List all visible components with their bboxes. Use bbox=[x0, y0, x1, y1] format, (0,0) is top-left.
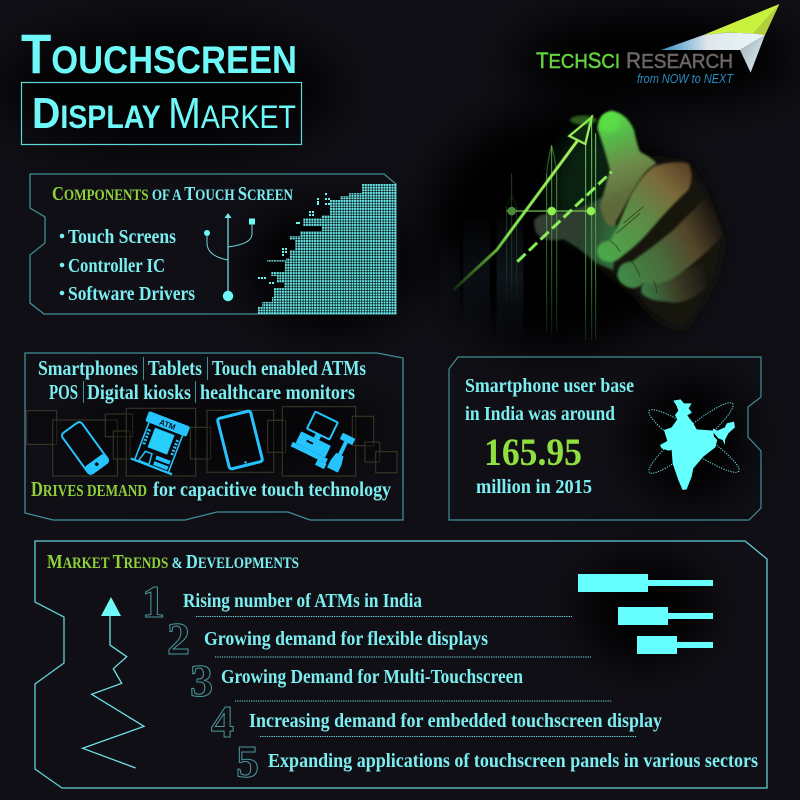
list of components: Touch Screens bbox=[68, 226, 176, 248]
numerals: 3 bbox=[190, 655, 213, 706]
trend list: Increasing demand for embedded touchscreen display bbox=[249, 710, 662, 732]
icon: ATM bbox=[131, 411, 190, 474]
panel: market trends and developments bbox=[35, 541, 767, 788]
icon: tablet bbox=[217, 411, 263, 469]
statistic text: million in 2015 bbox=[476, 476, 592, 498]
statistic text: Smartphone user base bbox=[465, 375, 634, 397]
bars graphic bbox=[578, 574, 713, 654]
icon: zigzag up arrow bbox=[83, 597, 144, 768]
trend list: Expanding applications of touchscreen panels in various sectors bbox=[268, 750, 758, 772]
second finger bbox=[597, 162, 692, 262]
heading: COMPONENTS OF A TOUCH SCREEN bbox=[52, 183, 293, 205]
finger details bbox=[610, 207, 657, 293]
icon: POS terminal bbox=[288, 408, 358, 476]
title box: Display Market: DISPLAY MARKET bbox=[32, 89, 296, 138]
heading: MARKET TRENDS & DEVELOPMENTS bbox=[47, 551, 299, 573]
dot matrix graphic bbox=[258, 184, 396, 314]
trend list: Growing Demand for Multi-Touchscreen bbox=[221, 666, 523, 688]
list of components: Controller IC bbox=[68, 255, 165, 277]
applications text: POS bbox=[49, 380, 78, 404]
numerals bbox=[142, 576, 259, 787]
numerals: 2 bbox=[167, 613, 190, 664]
dashed trend line bbox=[517, 172, 612, 262]
statistic text bbox=[465, 375, 634, 498]
numerals: 4 bbox=[211, 696, 234, 747]
numerals: 1 bbox=[142, 576, 165, 627]
icon: USB symbol bbox=[204, 213, 255, 301]
applications text: healthcare monitors bbox=[200, 380, 355, 404]
logo: TechSci Research bbox=[536, 4, 779, 86]
decorative squares bbox=[27, 407, 397, 476]
applications text bbox=[38, 356, 366, 404]
panel: components of a touch screen bbox=[30, 174, 396, 314]
hand silhouette bbox=[580, 159, 723, 330]
thumb bbox=[534, 197, 617, 270]
logo wordmark: TECHSCI bbox=[536, 48, 620, 73]
applications text: Touch enabled ATMs bbox=[212, 356, 366, 380]
vertical chart lines bbox=[507, 115, 596, 340]
applications text: Smartphones bbox=[38, 356, 138, 380]
logo mark bbox=[661, 4, 779, 73]
logo: TechSci Research: RESEARCH bbox=[626, 48, 733, 73]
applications text: Tablets bbox=[148, 356, 202, 380]
solid trend arrow bbox=[453, 117, 592, 290]
chart columns bbox=[440, 217, 523, 340]
statistic text: in India was around bbox=[465, 403, 615, 425]
third finger bbox=[617, 197, 722, 288]
applications text: Digital kiosks bbox=[87, 380, 191, 404]
icon: ATM: ATM bbox=[158, 418, 177, 432]
image: hand drawing rising chart bbox=[440, 111, 723, 340]
panel: smartphone user base bbox=[449, 357, 761, 520]
icon: India map with orbits bbox=[643, 396, 744, 490]
index finger bbox=[597, 111, 657, 227]
title: Touchscreen: TOUCHSCREEN bbox=[21, 22, 297, 85]
trend list bbox=[183, 590, 758, 772]
list of components bbox=[60, 226, 195, 305]
trend list: Growing demand for flexible displays bbox=[204, 628, 488, 650]
trend list: Rising number of ATMs in India bbox=[183, 590, 422, 612]
drives demand line bbox=[31, 477, 391, 501]
drives demand line: DRIVES DEMAND bbox=[31, 477, 147, 501]
panel: applications bbox=[25, 353, 403, 520]
fourth finger bbox=[641, 263, 707, 303]
list of components: Software Drivers bbox=[68, 283, 195, 305]
numerals: 5 bbox=[236, 736, 259, 787]
horizontal chart line with dots bbox=[507, 207, 595, 215]
drives demand line: for capacitive touch technology bbox=[153, 477, 391, 501]
statistic value: 165.95 bbox=[484, 431, 582, 474]
logo tagline: from NOW to NEXT bbox=[637, 71, 734, 86]
icon: smartphone bbox=[61, 421, 109, 475]
